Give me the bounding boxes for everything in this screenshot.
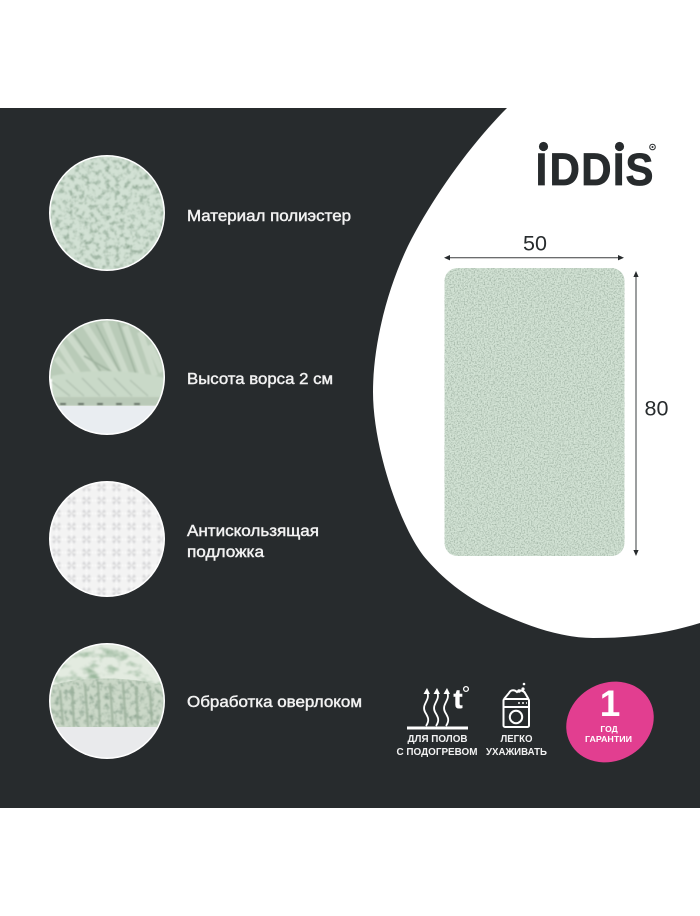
label: pile height: Высота ворса 2 см <box>187 371 333 388</box>
texture circle: polyester pile <box>49 155 165 271</box>
icon: washing machine <box>504 683 529 727</box>
dimension: width 50: 50 <box>523 232 547 256</box>
label: overlock: Обработка оверлоком <box>187 694 362 711</box>
bath mat product <box>444 268 624 556</box>
label: anti-slip backing: подложка <box>187 544 264 561</box>
dark background panel <box>0 108 700 808</box>
feature: anti-slip backing <box>49 481 319 597</box>
feature: pile height <box>49 319 333 436</box>
icon: heated floor <box>407 684 468 730</box>
label: easy care: ЛЕГКО <box>500 734 533 745</box>
brand logo: IDDIS <box>536 146 653 195</box>
dimension: width 50 <box>444 232 624 260</box>
badge: 1 year warranty <box>552 666 668 778</box>
icon: heated floor: t <box>454 684 462 714</box>
feature: overlock edge <box>49 643 362 759</box>
badge: 1 year warranty: 1 <box>600 683 620 724</box>
label: for heated floors: С ПОДОГРЕВОМ <box>396 747 478 758</box>
texture circle: anti-slip lattice <box>49 481 165 597</box>
badge: 1 year warranty: ГАРАНТИИ <box>585 734 632 744</box>
texture circle: overlock edge <box>49 643 165 759</box>
label: easy care: УХАЖИВАТЬ <box>486 747 547 758</box>
badge: 1 year warranty: ГОД <box>600 724 618 734</box>
dimension: height 80 <box>633 271 668 556</box>
dimension: height 80: 80 <box>645 396 668 420</box>
feature: polyester material <box>49 155 351 271</box>
label: for heated floors: ДЛЯ ПОЛОВ <box>408 734 468 745</box>
texture circle: pile side view <box>49 319 165 436</box>
white curved area <box>373 108 700 638</box>
label: anti-slip backing: Антискользящая <box>187 523 319 540</box>
label: material: Материал полиэстер <box>187 208 351 225</box>
